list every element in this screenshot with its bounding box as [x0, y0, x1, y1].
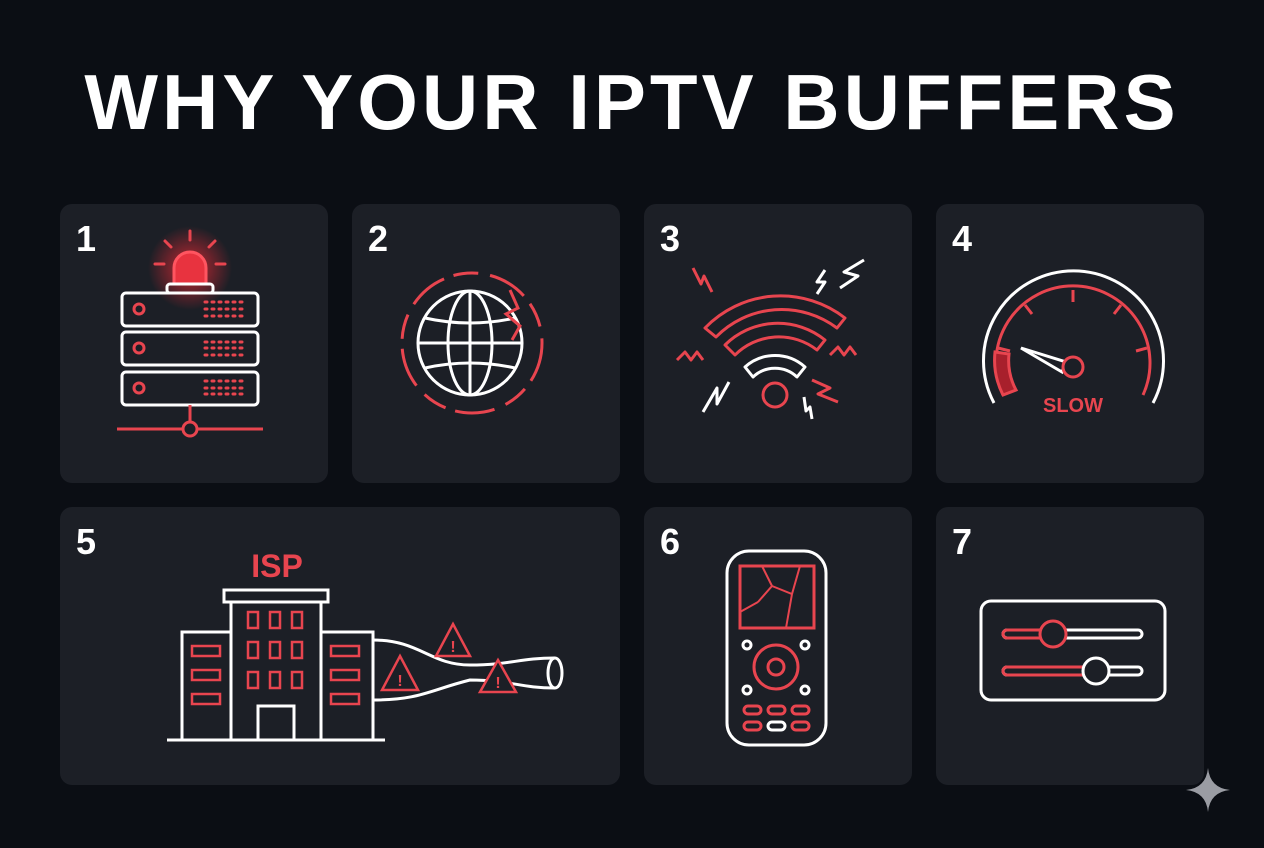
panel 1: server	[60, 204, 328, 483]
icon: sliders	[981, 601, 1165, 700]
panel 7: settings: 7	[952, 521, 972, 562]
icon: broken remote	[727, 551, 826, 745]
panel 2: globe	[352, 204, 620, 483]
icon: slow gauge	[984, 271, 1164, 403]
icon: building and throttled pipe	[167, 590, 562, 740]
icon: building and throttled pipe: !	[495, 675, 501, 692]
icon: sparkle	[1186, 768, 1230, 812]
panel 5: ISP: 5	[76, 521, 96, 562]
panel 4: speedometer	[936, 204, 1204, 483]
icon: broken wifi	[677, 260, 864, 419]
icon: broken globe	[402, 273, 542, 413]
panel 4: speedometer: 4	[952, 218, 972, 259]
icon: server stack	[117, 293, 263, 436]
icon: building and throttled pipe: !	[397, 673, 403, 690]
panel 4: speedometer: SLOW	[1043, 395, 1103, 417]
title: WHY YOUR IPTV BUFFERS	[84, 58, 1180, 146]
panel 6: remote	[644, 507, 912, 785]
panel 6: remote: 6	[660, 521, 680, 562]
panel 1: server: 1	[76, 218, 96, 259]
icon: building and throttled pipe: !	[450, 639, 456, 656]
panel 5: ISP	[60, 507, 620, 785]
panel 7: settings	[936, 507, 1204, 785]
panel 3: wifi: 3	[660, 218, 680, 259]
panel 3: wifi	[644, 204, 912, 483]
panel 2: globe: 2	[368, 218, 388, 259]
icon: alarm light	[148, 226, 232, 310]
ISP label: ISP	[251, 548, 303, 584]
